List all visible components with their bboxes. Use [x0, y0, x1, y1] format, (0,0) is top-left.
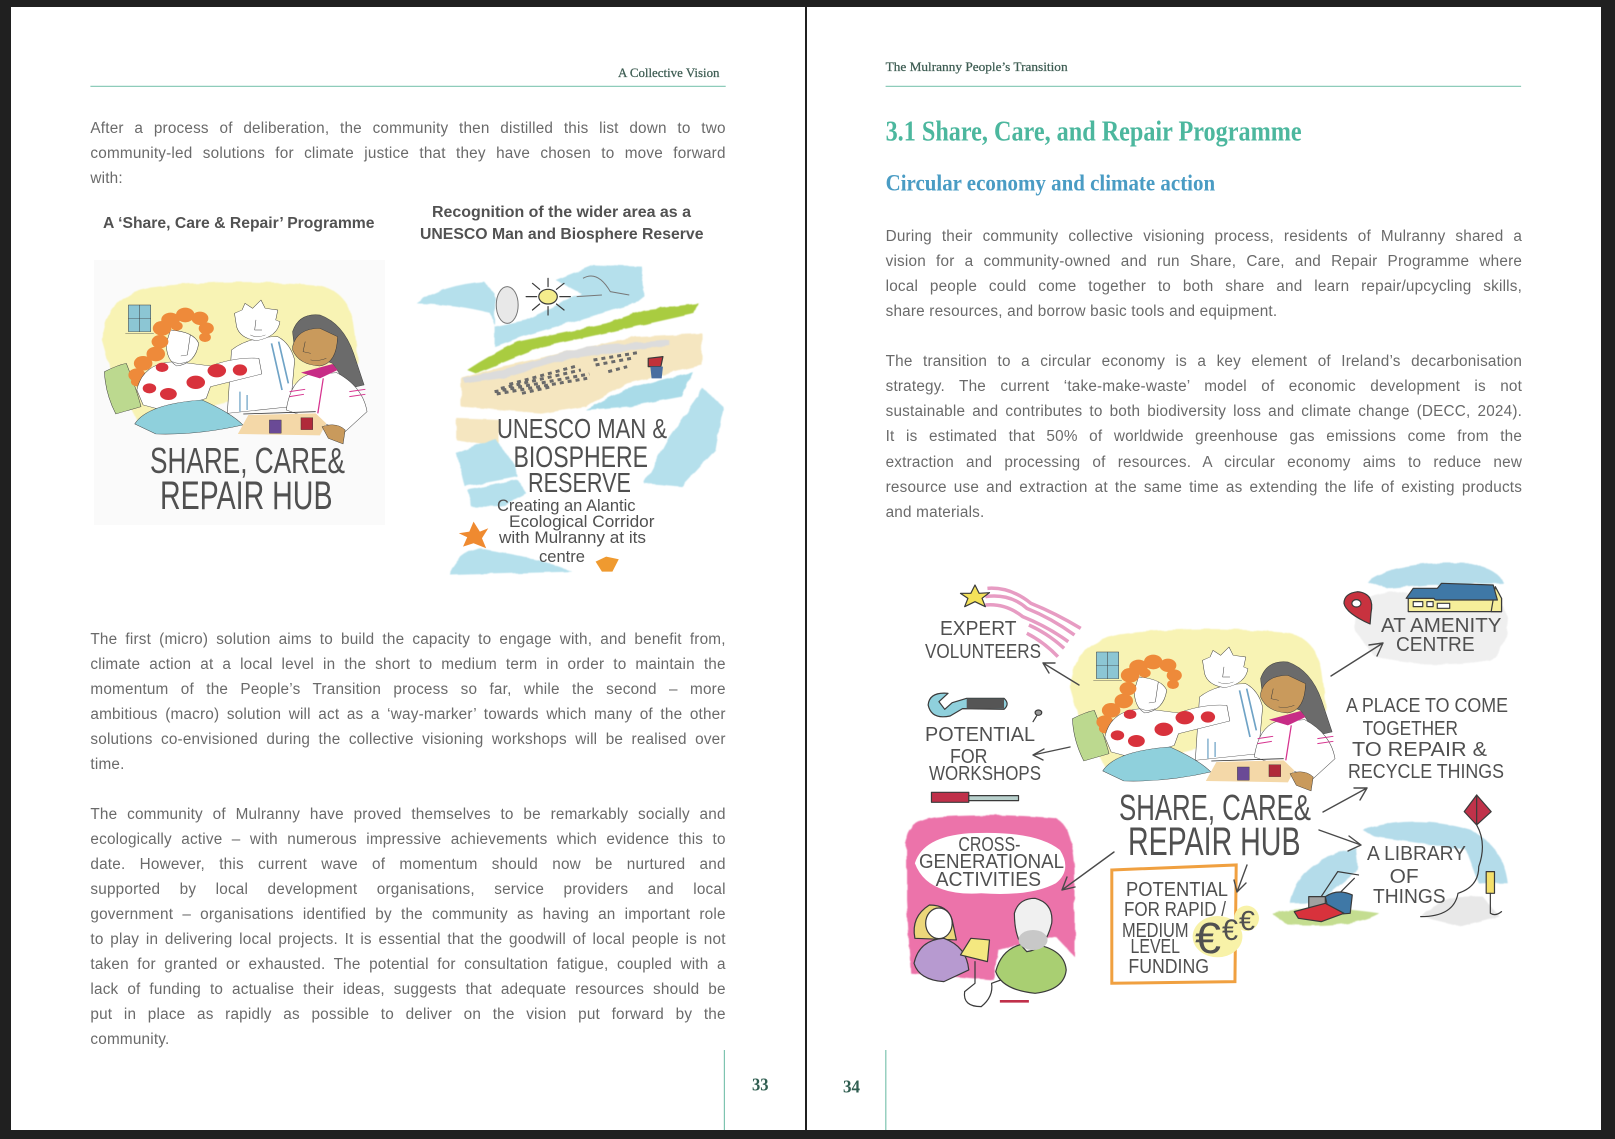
left intro paragraph: After a process of deliberation, the community then distilled this list down to two [90, 120, 726, 137]
node: at amenity centre: AT AMENITY [1381, 615, 1502, 637]
illustration: UNESCO man and biosphere reserve: RESERVE [528, 467, 631, 498]
illustration: UNESCO man and biosphere reserve [417, 265, 723, 575]
node: potential for rapid medium level funding [1112, 865, 1259, 983]
node: a place to come together [1346, 695, 1508, 783]
right paragraph: circular economy: sustainable and contributes to both biodiversity loss and climate change (DECC, 2024). [886, 403, 1522, 420]
heading: Recognition of the wider area: Recognition of the wider area as a [432, 204, 691, 221]
left intro paragraph: community-led solutions for climate justice that they have chosen to move forward [90, 145, 726, 162]
right header rule [886, 86, 1521, 87]
right footer rule [885, 1050, 886, 1130]
right paragraph: circular economy: strategy. The current ‘take-make-waste’ model of economic development is not [886, 378, 1522, 395]
node: cross-generational activities: ACTIVITIES [936, 869, 1041, 891]
node: potential for rapid medium level funding: LEVEL [1130, 936, 1180, 958]
left intro paragraph: with: [90, 170, 123, 187]
node: potential for rapid medium level funding: FUNDING [1128, 956, 1209, 978]
illustration: UNESCO man and biosphere reserve: with Mulranny at its [498, 528, 646, 547]
node: a library of things [1271, 795, 1508, 927]
left paragraph: community momentum: community. [90, 1031, 169, 1048]
page number 34: 34 [843, 1077, 860, 1097]
page number 33: 33 [752, 1075, 768, 1095]
heading: Share Care and Repair Programme: A ‘Share, Care & Repair’ Programme [103, 215, 375, 232]
left paragraph: community momentum [90, 806, 726, 1048]
left paragraph: community momentum: to play in delivering local projects. It is essential that the goodwill of local people is not [90, 931, 726, 948]
left paragraph: community momentum: supported by local development organisations, service providers and local [90, 881, 726, 898]
left header rule [90, 86, 726, 87]
right paragraph: visioning process: During their community collective visioning process, residents of Mulranny shared a [886, 228, 1522, 244]
node: potential for rapid medium level funding: € [1239, 905, 1255, 936]
hub label [1119, 787, 1311, 864]
left paragraph: micro and macro solutions: momentum of the People’s Transition process so far, while the second – more [90, 681, 726, 698]
right paragraph: circular economy: resource use and extraction at the same time as extending the life of existing products [886, 479, 1522, 496]
panel: right page [807, 7, 1600, 1130]
left paragraph: community momentum: ecologically active – with numerous impressive achievements which evidence this to [90, 831, 726, 848]
heading: Recognition of the wider area [420, 204, 704, 243]
right paragraph: circular economy [886, 353, 1522, 521]
node: a place to come together: TO REPAIR & [1352, 739, 1488, 761]
right paragraph: visioning process: vision for a community-owned and run Share, Care, and Repair Programme where [886, 252, 1522, 270]
node: cross-generational activities: CROSS- [958, 834, 1020, 856]
right paragraph: circular economy: extraction and processing of resources. A circular economy aims to reduce new [886, 454, 1522, 471]
node: potential for workshops: POTENTIAL [925, 724, 1035, 746]
illustration: UNESCO man and biosphere reserve: UNESCO MAN & [497, 413, 667, 444]
left footer rule [724, 1050, 725, 1130]
left paragraph: community momentum: government – organisations identified by the community as having an important role [90, 906, 726, 923]
node: potential for rapid medium level funding: POTENTIAL [1126, 879, 1228, 901]
node: expert volunteers: VOLUNTEERS [925, 641, 1041, 663]
left paragraph: community momentum: taken for granted or exhausted. The potential for consultation fatigue, coupled with a [90, 956, 726, 973]
node: a place to come together: A PLACE TO COME [1346, 695, 1508, 717]
right paragraph: visioning process: local people could come together to both share and learn repair/upcycling skills, [886, 278, 1522, 294]
left paragraph: micro and macro solutions: solutions co-envisioned during the collective visioning workshops will be realised over [90, 731, 726, 748]
node: at amenity centre: CENTRE [1396, 634, 1475, 656]
left paragraph: community momentum: put in place as rapidly as possible to deliver on the vision put forward by the [90, 1006, 726, 1023]
node: at amenity centre [1344, 563, 1508, 664]
illustration: UNESCO man and biosphere reserve: Ecological Corridor [509, 512, 655, 531]
node: cross-generational activities: GENERATIONAL [919, 851, 1064, 873]
left paragraph: micro and macro solutions: time. [90, 756, 125, 773]
left paragraph: community momentum: date. However, this current wave of momentum should now be nurtured and [90, 856, 726, 873]
left intro paragraph [90, 120, 726, 187]
left paragraph: community momentum: The community of Mulranny have proved themselves to be remarkably socially and [90, 806, 726, 823]
illustration: share care repair hub (small): REPAIR HUB [160, 474, 332, 518]
illustration: UNESCO man and biosphere reserve: Creating an Alantic [497, 496, 636, 515]
node: a library of things: THINGS [1373, 886, 1446, 908]
hub label: REPAIR HUB [1128, 820, 1300, 864]
node: expert volunteers [925, 585, 1081, 663]
panel: left page [10, 7, 805, 1130]
right paragraph: circular economy: The transition to a circular economy is a key element of Ireland’s decarbonisation [886, 353, 1522, 370]
right paragraph: circular economy: and materials. [886, 504, 984, 521]
illustration: share care repair hub mind map [907, 563, 1508, 1007]
title: 3.1 Share, Care, and Repair Programme: 3.1 Share, Care, and Repair Programme [886, 116, 1302, 148]
left paragraph: micro and macro solutions: climate action at a local level in the short to medium term in order to maintain the [90, 656, 726, 673]
node: potential for rapid medium level funding: € [1195, 914, 1221, 963]
node: potential for rapid medium level funding: € [1222, 914, 1238, 947]
left paragraph: micro and macro solutions: ambitious (macro) solution will act as a ‘way-marker’ towards which many of the other [90, 706, 726, 723]
hub label: SHARE, CARE& [1119, 787, 1311, 828]
left paragraph: community momentum: lack of funding to actualise their ideas, suggests that adequate resources should be [90, 981, 726, 998]
node: potential for rapid medium level funding: FOR RAPID / [1124, 899, 1226, 921]
node: potential for rapid medium level funding: MEDIUM [1122, 920, 1188, 942]
illustration: share care repair hub (small) [94, 260, 385, 525]
illustration: UNESCO man and biosphere reserve: BIOSPHERE [514, 441, 648, 474]
right paragraph: visioning process [886, 228, 1522, 320]
illustration: UNESCO man and biosphere reserve: centre [539, 547, 585, 566]
node: potential for workshops: WORKSHOPS [929, 763, 1041, 785]
right paragraph: circular economy: It is estimated that 50% of worldwide greenhouse gas emissions come from the [886, 428, 1522, 445]
node: cross-generational activities [907, 815, 1074, 1007]
left paragraph: micro and macro solutions: The first (micro) solution aims to build the capacity to engage with, and benefit from, [90, 631, 726, 648]
node: a library of things: A LIBRARY [1367, 843, 1466, 865]
node: a place to come together: RECYCLE THINGS [1348, 761, 1504, 783]
header: A Collective Vision: A Collective Vision [618, 65, 720, 80]
left paragraph: micro and macro solutions [90, 631, 726, 773]
node: potential for workshops [925, 693, 1042, 802]
node: potential for workshops: FOR [950, 746, 988, 768]
heading: Recognition of the wider area: UNESCO Man and Biosphere Reserve [420, 226, 704, 243]
hub scene with people [1070, 629, 1335, 791]
header: The Mulranny People's Transition: The Mulranny People’s Transition [886, 59, 1068, 74]
node: a place to come together: TOGETHER [1363, 718, 1458, 740]
right paragraph: visioning process: share resources, and borrow basic tools and equipment. [886, 302, 1277, 320]
arrows from hub to nodes [1033, 643, 1383, 892]
subheading: Circular economy and climate action: Circular economy and climate action [886, 170, 1215, 196]
node: expert volunteers: EXPERT [940, 618, 1016, 640]
node: a library of things: OF [1390, 866, 1419, 888]
illustration: share care repair hub (small): SHARE, CARE& [150, 440, 345, 481]
